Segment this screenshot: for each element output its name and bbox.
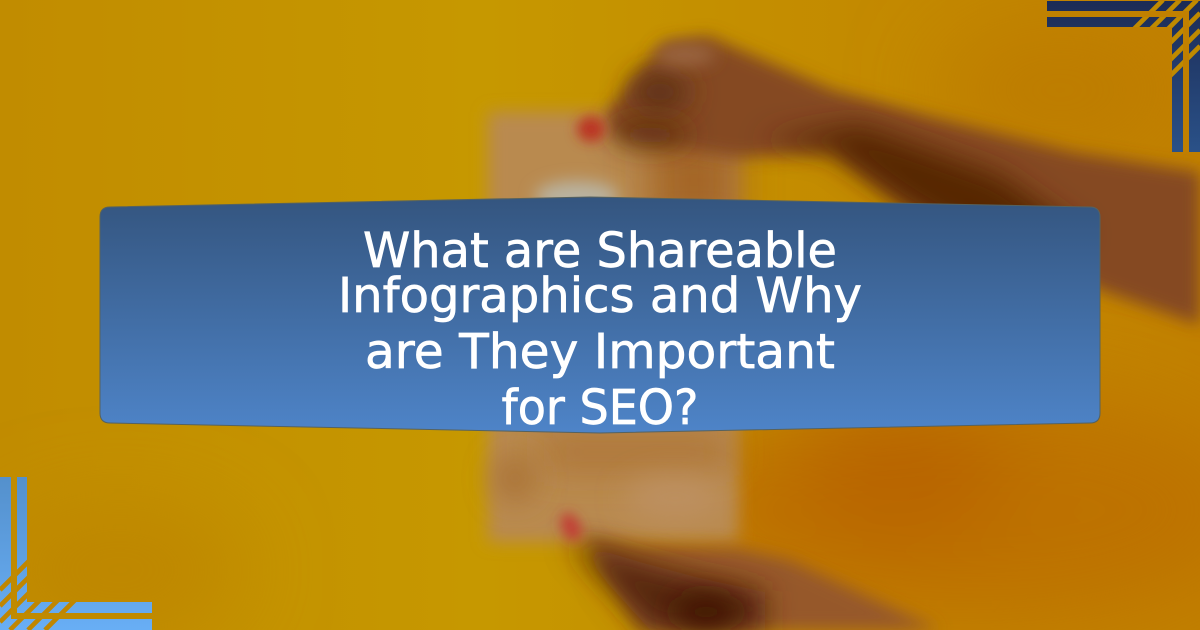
banner panel (100, 197, 1100, 433)
title text: are They Important (365, 324, 835, 380)
title text (338, 223, 862, 436)
upper hand and arm (577, 36, 1200, 325)
title text: What are Shareable (363, 223, 837, 279)
title text: Infographics and Why (338, 268, 862, 324)
card (488, 112, 738, 542)
corner ornament: bottom left (0, 477, 152, 630)
lower hand (557, 510, 940, 630)
title text: for SEO? (502, 380, 698, 436)
corner ornament: top right (1047, 1, 1200, 152)
